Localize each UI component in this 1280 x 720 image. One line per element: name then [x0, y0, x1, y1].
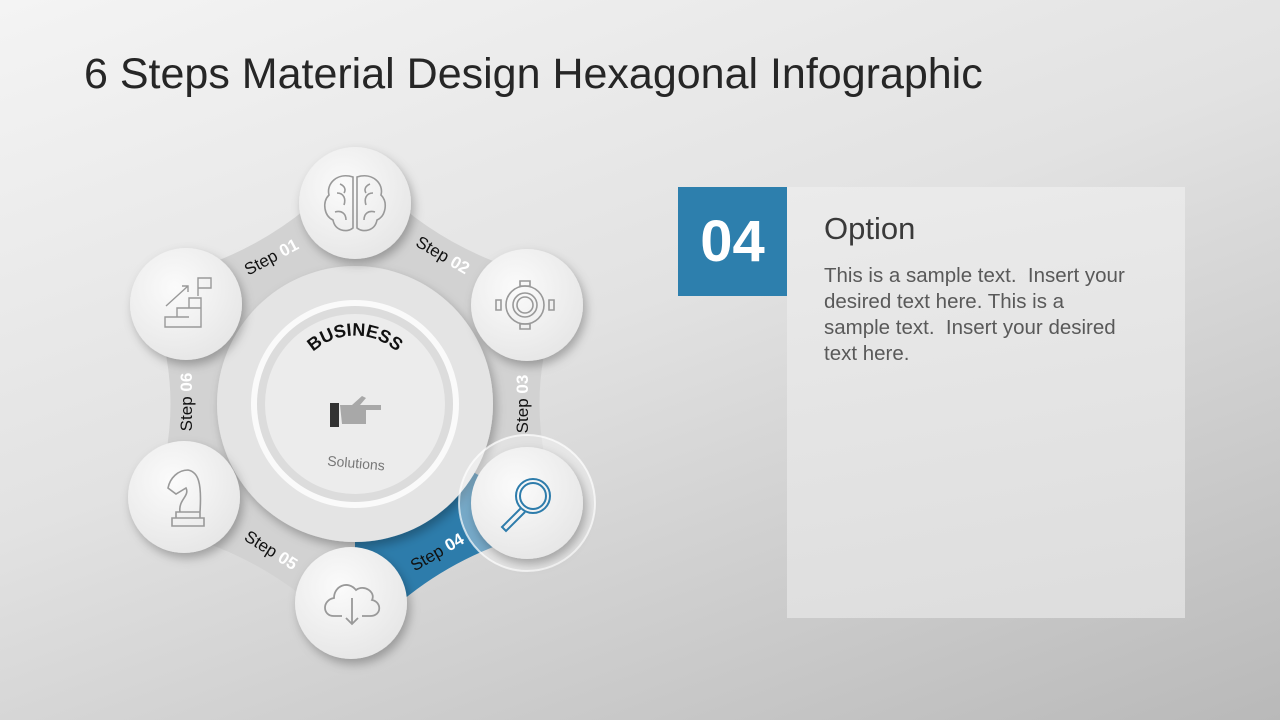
circle: magnifier (active): [471, 447, 583, 559]
circle: cloud download: [295, 547, 407, 659]
step labels: Step 01: [241, 235, 302, 279]
solutions text: Solutions: [327, 453, 385, 473]
body text: This is a sample text. Insert your: [824, 264, 1125, 287]
body text: sample text. Insert your desired: [824, 316, 1116, 339]
step labels: Step 02: [413, 232, 473, 278]
body text: [824, 264, 1125, 365]
business text: BUSINESS: [306, 323, 402, 351]
blue segment step 04: [355, 404, 567, 648]
highlight halo step 04: [459, 435, 595, 571]
inner disc: [215, 266, 501, 551]
circle: growth stairs: [130, 248, 242, 360]
body text: text here.: [824, 342, 909, 365]
circle: chess knight: [128, 441, 240, 553]
panel: option text: [787, 187, 1185, 618]
number badge 04: 04: [700, 209, 765, 274]
icon: pointing hand: [330, 396, 381, 427]
step labels: Step 05: [241, 527, 301, 574]
number badge 04: [678, 187, 787, 296]
step labels: Step 06: [177, 373, 196, 431]
circle: brain: [299, 147, 411, 259]
step labels: Step 03: [513, 375, 532, 433]
circle: gear: [471, 249, 583, 361]
step labels: [177, 232, 532, 575]
band ring: [143, 160, 567, 648]
title: 6 Steps Material Design Hexagonal Infographic: [84, 50, 983, 98]
option heading: Option: [824, 211, 915, 246]
body text: desired text here. This is a: [824, 290, 1064, 313]
step labels: Step 04: [407, 529, 468, 575]
